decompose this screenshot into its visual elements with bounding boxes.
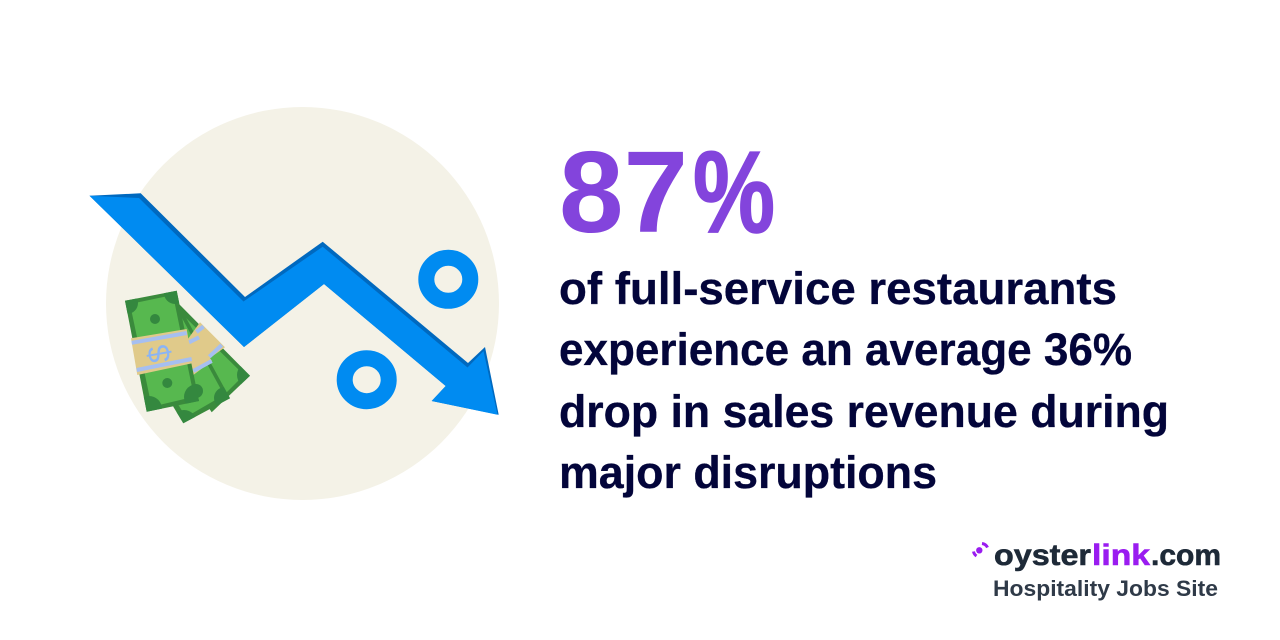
heading: 87% statistic: 87 — [559, 127, 688, 257]
heading: 87% statistic: % — [693, 127, 775, 257]
logo wordmark: oyster — [994, 539, 1091, 572]
dollar sign: $ — [140, 342, 178, 366]
icon: percent ring upper — [426, 258, 470, 301]
text block: description — [559, 263, 1169, 498]
heading: 87% statistic — [559, 127, 775, 257]
icon: percent ring lower — [345, 358, 389, 401]
front bill — [125, 291, 199, 412]
logo tagline: Hospitality Jobs Site — [993, 576, 1218, 601]
back bill — [170, 303, 250, 412]
logo: oysterlink — [974, 539, 1221, 601]
text block: description: major disruptions — [559, 447, 937, 498]
logo wordmark: link — [1092, 539, 1150, 572]
infographic canvas — [90, 107, 1220, 600]
panel: beige background circle — [106, 107, 499, 500]
paper band back — [180, 322, 225, 375]
arrow: falling trend — [90, 193, 499, 415]
logo wordmark — [994, 539, 1221, 572]
middle bill — [173, 303, 230, 423]
paper band front — [131, 329, 192, 375]
icon: stack of money — [125, 290, 250, 424]
text block: description: of full-service restaurants — [559, 263, 1117, 314]
icon: logo signal mark — [974, 544, 988, 556]
text block: description: drop in sales revenue during — [559, 386, 1169, 437]
text block: description: experience an average 36% — [559, 324, 1132, 375]
logo wordmark: .com — [1151, 539, 1221, 572]
